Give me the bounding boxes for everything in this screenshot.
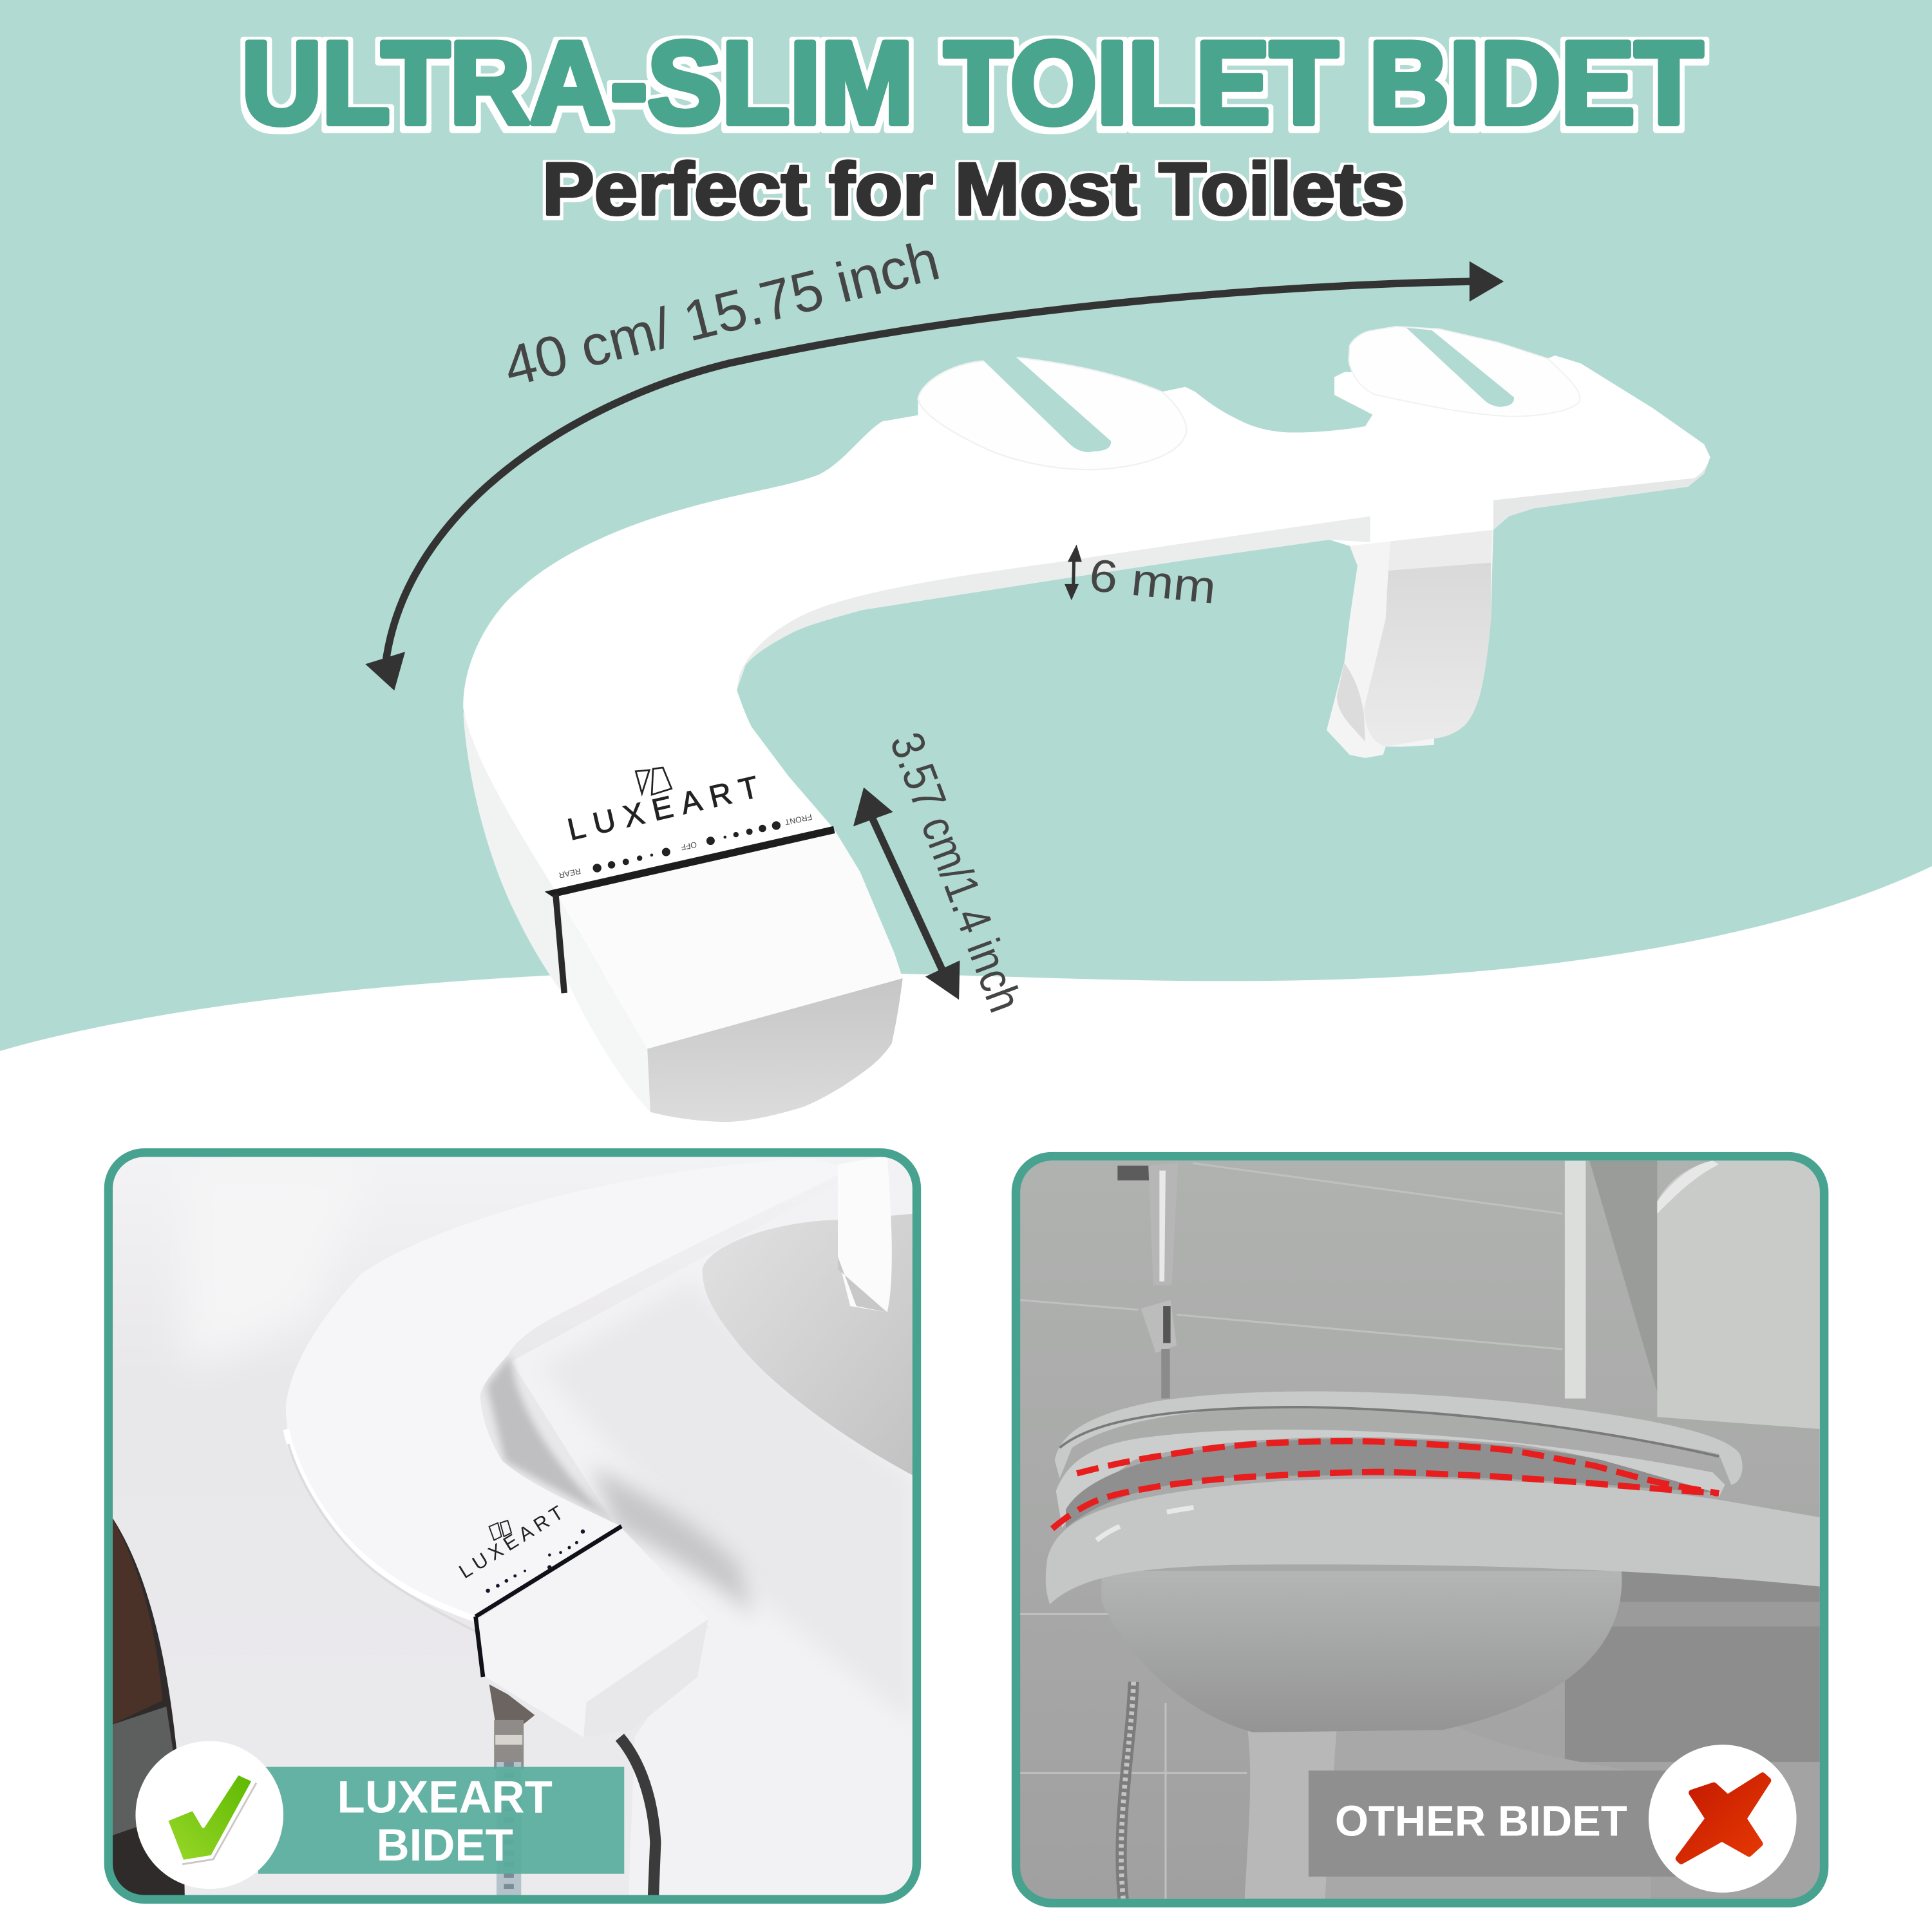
icon: green check (135, 1741, 283, 1889)
water bracket (1327, 500, 1493, 758)
arrow: thickness (1065, 544, 1082, 600)
badge: Luxeart label (258, 1767, 624, 1874)
photo wordmark: LUXEART (455, 1502, 567, 1583)
mode dots and labels (558, 812, 813, 880)
toilet rim (1046, 1479, 1824, 1604)
icon: red cross (1649, 1745, 1797, 1893)
arrow: length curved double arrow (365, 261, 1504, 690)
title: ULTRA-SLIM TOILET BIDET (242, 17, 1703, 148)
photo dots (486, 1530, 585, 1593)
product: bidet attachment (463, 327, 1710, 1122)
width label: 3.57 cm/1.4 inch (880, 726, 1032, 1019)
bidet plate (286, 1258, 667, 1615)
thickness label: 6 mm (1087, 550, 1218, 614)
lower shell side (463, 712, 579, 996)
top plate (463, 327, 1710, 889)
white wave lower background (0, 866, 1932, 1932)
hose fitting and hose (489, 1684, 535, 1725)
shower sprayer (1117, 1163, 1178, 1399)
subtitle: Perfect for Most Toilets (542, 148, 1405, 231)
panel border (1016, 1157, 1824, 1903)
black divider (476, 1526, 621, 1677)
badge: other bidet label: OTHER BIDET (1335, 1797, 1627, 1846)
length label: 40 cm/ 15.75 inch (497, 227, 945, 399)
front block (478, 1528, 708, 1738)
bowl (1101, 1571, 1622, 1732)
seat lower ring (1056, 1430, 1725, 1528)
left mounting disk with slot (918, 356, 1186, 469)
front face (647, 978, 903, 1122)
photo background (111, 1156, 914, 1900)
mounting bracket in photo (838, 1156, 892, 1312)
right mounting disk with slot (1349, 327, 1580, 417)
panel: Luxeart bidet photo (108, 1153, 916, 1904)
seat lid (1055, 1392, 1743, 1484)
panel: other bidet photo (1016, 1157, 1824, 1904)
mode dots and labels: OFF (680, 840, 697, 852)
badge: Luxeart label: LUXEART (337, 1772, 553, 1823)
left side face of block (561, 902, 650, 1112)
black divider band (554, 829, 834, 895)
red dashed outlines (1077, 1441, 1719, 1493)
toilet tank (1657, 1160, 1824, 1429)
brand wordmark: LUXEART (564, 770, 762, 848)
tile lines (1019, 1163, 1562, 1904)
plate edge thickness right end (1493, 457, 1710, 530)
panel border (108, 1153, 916, 1899)
mode dots and labels: REAR (558, 866, 582, 880)
brand logo icon (636, 768, 672, 795)
recess behind bowl (1565, 1571, 1824, 1897)
inner edge thickness (737, 516, 1370, 690)
wall (1019, 1160, 1820, 1900)
toilet rim and bowl (515, 1340, 893, 1723)
lower hose (1121, 1682, 1133, 1904)
top face of front block (554, 829, 903, 1049)
pedestal (1244, 1725, 1651, 1904)
mode dots and labels: FRONT (784, 812, 813, 827)
shadow under bidet (591, 1466, 754, 1616)
badge: other bidet label (1309, 1770, 1676, 1877)
wall pipe (1565, 1158, 1586, 1399)
arrow: width (853, 788, 960, 999)
dark gap (1066, 1439, 1719, 1528)
photo logo icon (489, 1520, 511, 1540)
black wire (620, 1738, 656, 1904)
badge: Luxeart label: BIDET (377, 1820, 513, 1871)
